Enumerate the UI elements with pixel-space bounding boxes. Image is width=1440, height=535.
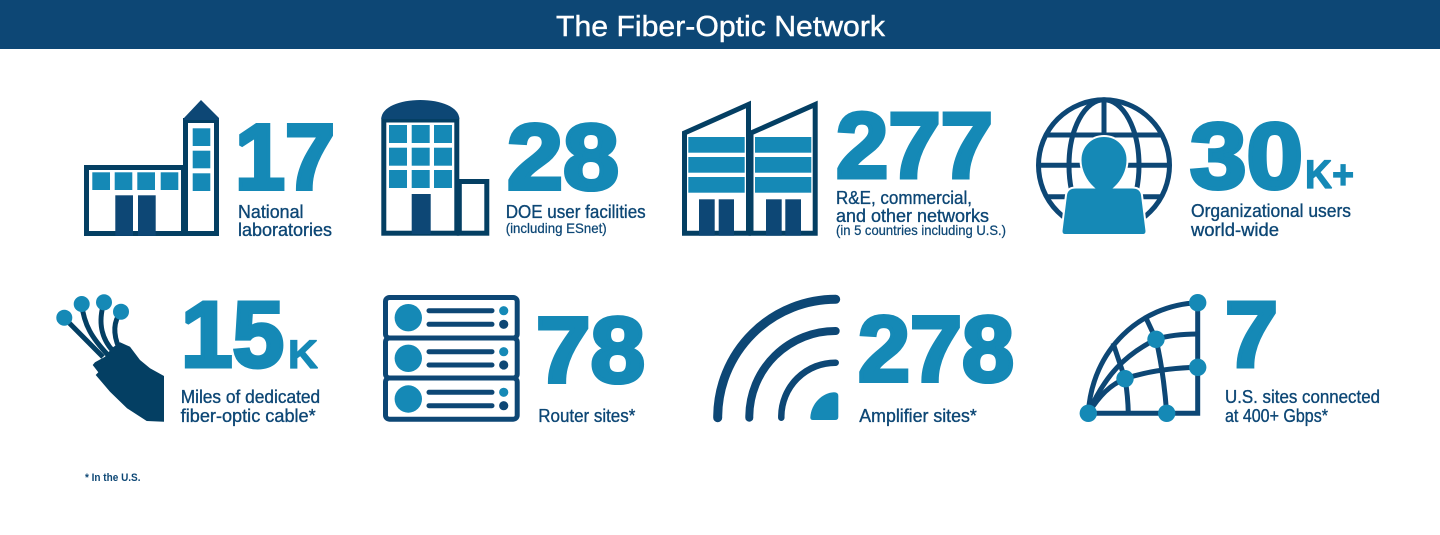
label: U.S. sites connected at 400+ Gbps xyxy=(1225,387,1380,426)
label: organizational users world-wide: world-wide xyxy=(1190,220,1279,240)
icon: laboratory building with tower xyxy=(86,100,219,236)
label: national laboratories xyxy=(238,202,332,240)
label: DOE user facilities: (including ESnet) xyxy=(506,220,607,236)
label: U.S. sites connected at 400+ Gbps: at 400+ Gbps* xyxy=(1225,406,1328,426)
number: 78: 78 xyxy=(536,298,645,402)
header banner xyxy=(0,0,1440,49)
number: 30: 30 xyxy=(1190,104,1303,208)
panel: organizational users xyxy=(1038,100,1354,240)
number: 15: 15 xyxy=(181,282,284,386)
label: organizational users world-wide: Organizational users xyxy=(1191,201,1351,221)
label: R&E, commercial, and other networks: and other networks xyxy=(836,206,989,226)
footnote: * In the U.S. xyxy=(85,472,140,484)
icon: domed building xyxy=(381,100,487,234)
panel: amplifier sites xyxy=(718,297,1014,426)
panel: router sites xyxy=(386,298,645,426)
label: R&E, commercial, and other networks xyxy=(836,188,1006,238)
label: national laboratories: National xyxy=(238,202,304,222)
label: DOE user facilities xyxy=(506,202,646,236)
label: U.S. sites connected at 400+ Gbps: U.S. sites connected xyxy=(1225,387,1380,407)
number: 7: 7 xyxy=(1225,282,1278,386)
number: 17: 17 xyxy=(235,105,335,209)
icon: globe with person xyxy=(1038,100,1170,235)
label: national laboratories: laboratories xyxy=(238,220,332,240)
icon: network mesh xyxy=(1080,294,1206,422)
panel: DOE user facilities xyxy=(381,100,646,236)
number: 277: 277 xyxy=(836,94,993,198)
label: router sites: Router sites* xyxy=(538,406,635,426)
label: miles of dedicated fiber-optic cable: Miles of dedicated xyxy=(181,387,320,407)
label: miles of dedicated fiber-optic cable: fiber-optic cable* xyxy=(181,406,316,426)
label: amplifier sites: Amplifier sites* xyxy=(859,406,977,426)
number: 278: 278 xyxy=(858,297,1014,401)
unit: K: K xyxy=(288,333,318,377)
label: DOE user facilities: DOE user facilities xyxy=(506,202,646,222)
person silhouette xyxy=(1062,136,1146,235)
icon: twin industrial buildings xyxy=(684,104,815,236)
icon: server rack xyxy=(386,298,517,419)
panel: U.S. sites connected xyxy=(1080,282,1380,426)
icon: signal arcs xyxy=(718,299,838,420)
label: R&E, commercial, and other networks: (in 5 countries including U.S.) xyxy=(836,222,1006,238)
unit: K+: K+ xyxy=(1305,153,1354,197)
label: R&E, commercial, and other networks: R&E, commercial, xyxy=(836,188,972,208)
panel: networks xyxy=(684,94,1006,238)
label: miles of dedicated fiber-optic cable xyxy=(181,387,320,426)
number: 28: 28 xyxy=(507,105,619,209)
icon: fiber-optic cable xyxy=(56,294,164,422)
panel: fiber-optic cable xyxy=(56,282,320,426)
label: organizational users world-wide xyxy=(1190,201,1351,240)
panel: national laboratories xyxy=(86,100,335,240)
title: The Fiber-Optic Network xyxy=(556,11,886,43)
